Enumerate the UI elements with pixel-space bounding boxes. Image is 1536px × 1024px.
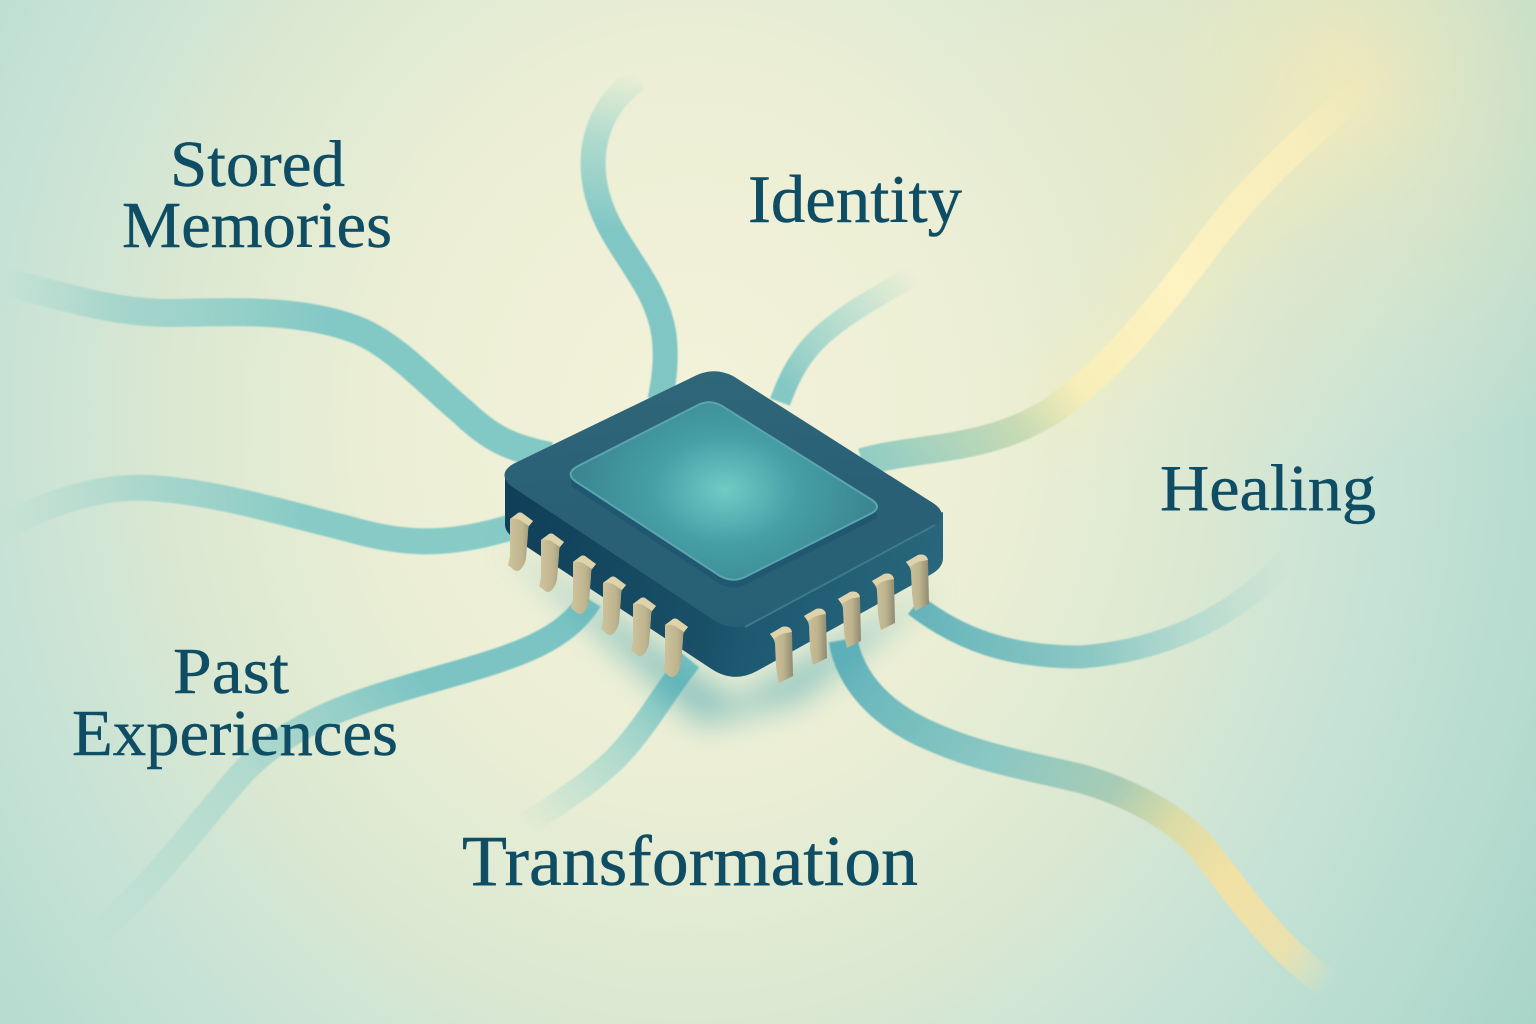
label: Stored Memories — [122, 128, 392, 262]
label: Stored Memories: Stored — [170, 128, 345, 201]
ribbon: stored memories stream — [5, 282, 550, 456]
label: Past Experiences: Experiences — [72, 697, 398, 770]
label: Identity: Identity — [748, 161, 962, 237]
label: Healing: Healing — [1160, 452, 1376, 525]
chip top surface — [504, 371, 942, 627]
chip body side — [505, 476, 943, 677]
label: Transformation: Transformation — [462, 821, 918, 901]
chip glowing window — [571, 402, 877, 580]
label: Past Experiences: Past — [173, 635, 289, 708]
ribbon: identity stream — [780, 275, 915, 402]
label: Past Experiences — [72, 635, 398, 770]
ribbon: past experiences stream — [90, 600, 590, 940]
microchip — [504, 371, 943, 683]
chip front edge highlight — [745, 525, 935, 627]
ribbon: healing stream — [915, 558, 1288, 657]
ribbon: left stream — [0, 488, 515, 541]
ribbon: lower right stream — [843, 640, 1345, 995]
chip inset lower edge — [571, 410, 877, 588]
ribbon: top stream — [593, 78, 665, 400]
label: Stored Memories: Memories — [122, 189, 392, 262]
pins: right side — [770, 554, 929, 683]
pins: left side — [508, 512, 688, 677]
chip shadow — [500, 540, 940, 725]
ribbon: glowing yellow stream — [862, 78, 1375, 462]
ribbon: transformation stream — [515, 660, 690, 830]
